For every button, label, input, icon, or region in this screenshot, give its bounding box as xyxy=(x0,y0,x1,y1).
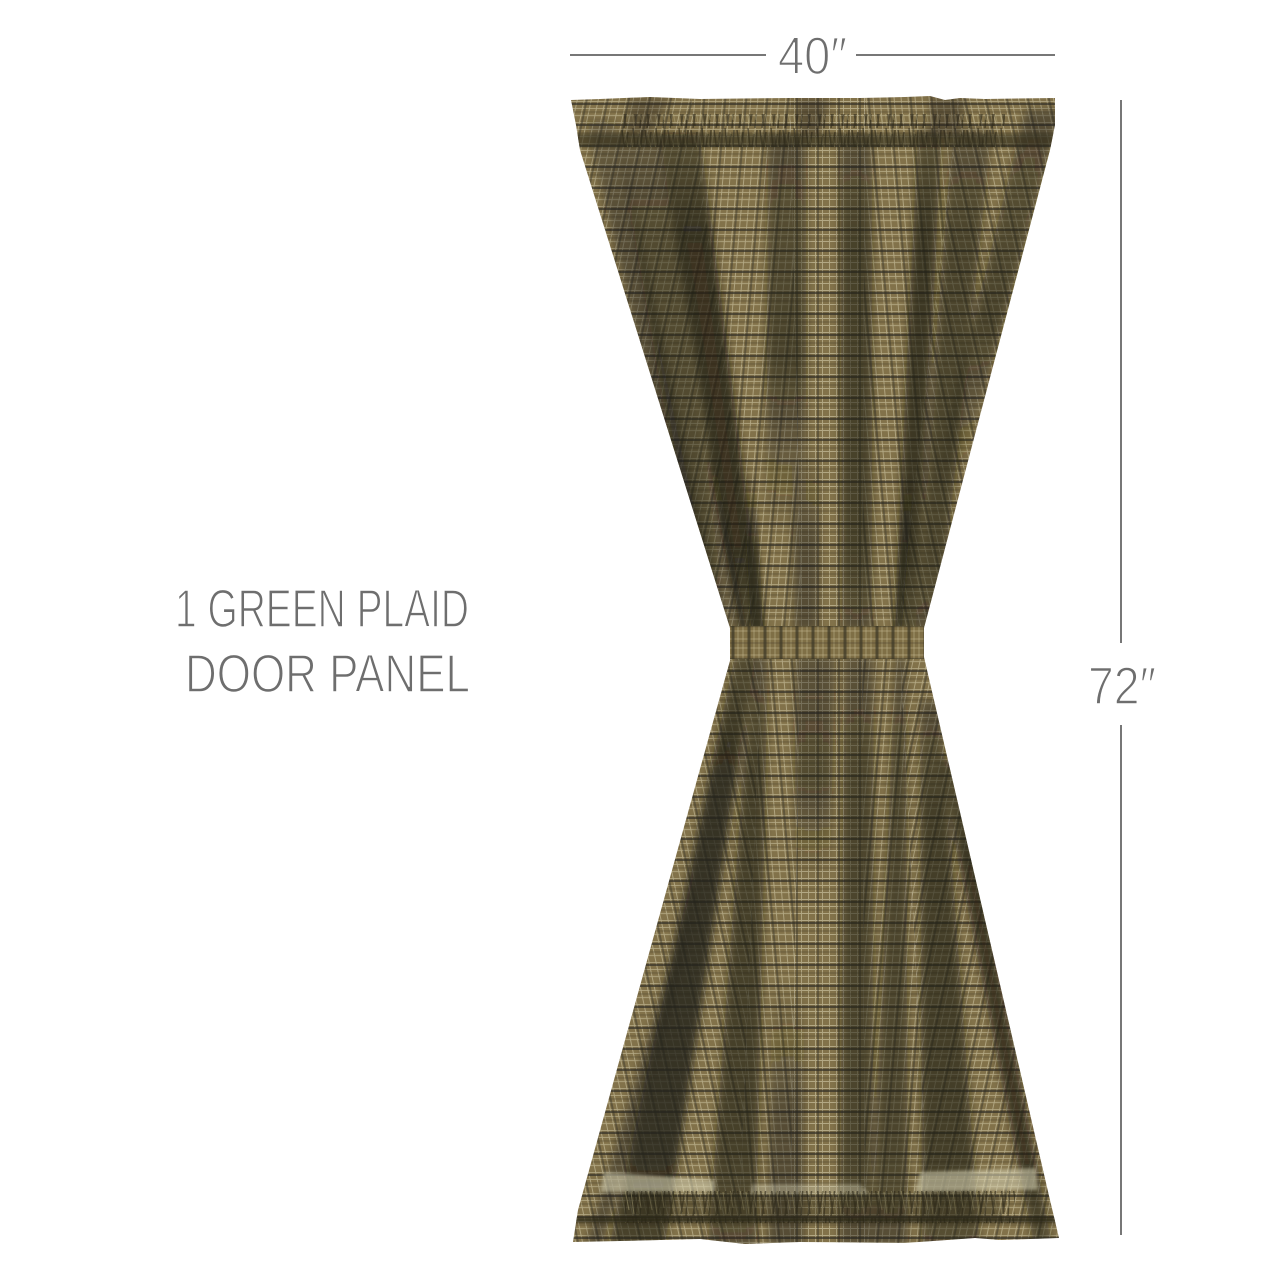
tie-back belt xyxy=(730,626,924,659)
height label: 72″ xyxy=(1088,657,1156,716)
bottom rod pocket xyxy=(572,1191,1060,1223)
lower drape xyxy=(560,650,1070,1250)
upper drape xyxy=(560,90,1065,640)
product title: 1 GREEN PLAID xyxy=(175,579,469,639)
curtain door panel xyxy=(560,90,1070,1250)
product title xyxy=(175,579,470,704)
width label: 40″ xyxy=(778,27,847,86)
top rod pocket xyxy=(571,98,1055,147)
bottom hem light patches xyxy=(600,1168,1038,1194)
product title: DOOR PANEL xyxy=(185,644,470,704)
